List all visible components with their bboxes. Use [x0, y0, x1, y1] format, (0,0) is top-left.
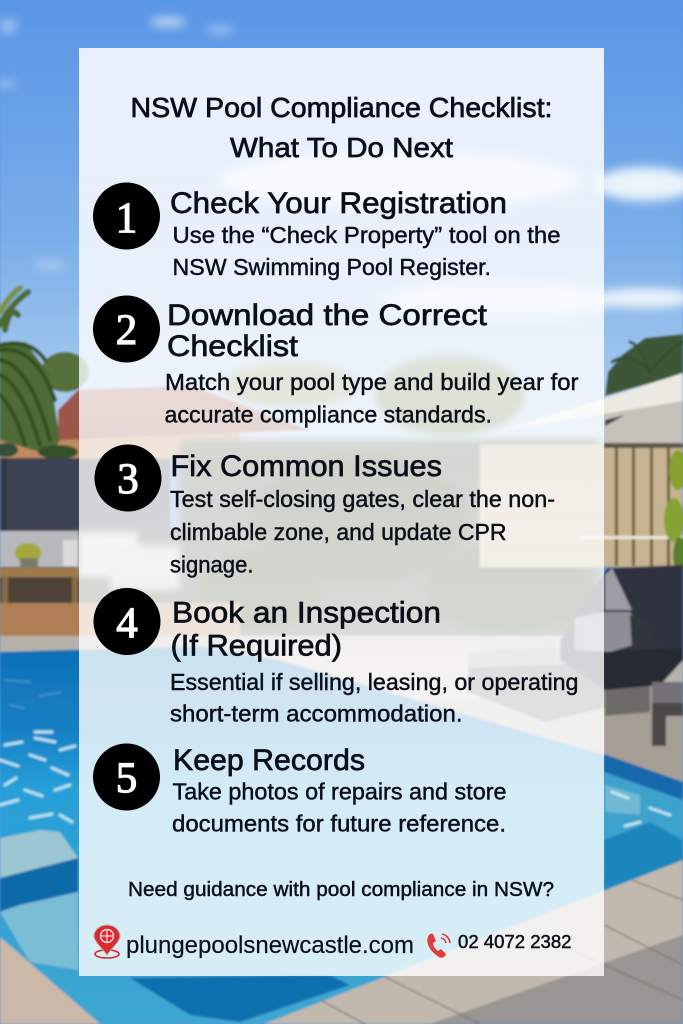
pool water: [0, 646, 683, 1024]
step 2 description: [164, 369, 579, 428]
step 5 description: Take photos of repairs and store: [172, 778, 506, 804]
umbrella: [505, 373, 683, 430]
number badge 3: [94, 444, 162, 512]
pool steps: [0, 830, 78, 878]
table: [0, 568, 78, 577]
clouds: [0, 17, 683, 318]
number badge 4: 4: [116, 600, 138, 647]
icon: location pin globe: [94, 925, 120, 958]
website: plungepoolsnewcastle.com: [126, 932, 414, 959]
paving around pool: [0, 636, 683, 766]
step 3: fix common issues: [94, 444, 555, 578]
lawn area behind furniture: [0, 530, 200, 605]
step 3 description: signage.: [170, 552, 254, 578]
step 3 description: [170, 486, 555, 578]
call to action question: Need guidance with pool compliance in NSW?: [128, 879, 554, 901]
step 5 description: [172, 778, 506, 836]
title: What To Do Next: [230, 132, 453, 163]
number badge 1: 1: [116, 195, 137, 242]
step 1 description: Use the “Check Property” tool on the: [172, 222, 560, 248]
ripples: [0, 732, 670, 826]
step 2 heading: [167, 299, 488, 363]
side chair: [652, 682, 683, 704]
step 2 heading: Download the Correct: [167, 299, 488, 332]
step 4 description: short-term accommodation.: [170, 700, 462, 726]
deck: [0, 603, 240, 638]
number badge 2: [93, 296, 160, 362]
title: [130, 92, 552, 163]
house: [0, 430, 240, 460]
contact row: [94, 925, 572, 959]
trees behind house: [41, 352, 89, 392]
step 5 description: documents for future reference.: [172, 810, 506, 836]
step 1 heading: Check Your Registration: [170, 187, 507, 220]
step 4 heading: Book an Inspection: [172, 596, 441, 630]
step 3 heading: Fix Common Issues: [170, 450, 442, 483]
icon: red phone: [427, 934, 450, 958]
plant at right edge: [664, 450, 683, 573]
number badge 1: [93, 182, 160, 250]
step 4 heading: [170, 596, 441, 662]
number badge 2: 2: [116, 307, 137, 354]
phone number: 02 4072 2382: [458, 932, 572, 952]
step 2 heading: Checklist: [167, 330, 299, 363]
step 2: download the correct checklist: [93, 296, 579, 428]
garden and trees, softly blurred: [180, 355, 600, 640]
step 4 description: [170, 669, 578, 726]
step 5: keep records: [93, 744, 506, 836]
number badge 5: [93, 744, 160, 810]
step 3 description: climbable zone, and update CPR: [170, 519, 506, 545]
dark fence left: [0, 458, 170, 530]
plant on table: [15, 543, 41, 570]
number badge 4: [94, 588, 160, 655]
step 4 description: Essential if selling, leasing, or operating: [170, 669, 578, 695]
right strip of the pool: [604, 754, 683, 800]
step 5 heading: Keep Records: [173, 744, 365, 777]
step 3 description: Test self-closing gates, clear the non-: [170, 486, 555, 512]
step 1: check your registration: [93, 182, 560, 280]
dark lounger: [560, 565, 683, 690]
right palm: [605, 334, 683, 396]
lounger base: [468, 645, 604, 722]
step 4 heading: (If Required): [170, 630, 342, 662]
number badge 5: 5: [116, 755, 137, 802]
sky: [0, 0, 683, 460]
coping lower left: [0, 937, 100, 1024]
sofa left: [0, 531, 78, 567]
paving lower right: [264, 860, 683, 1024]
step 1 description: [172, 222, 560, 280]
wood fence: [480, 445, 683, 567]
translucent white panel: [79, 48, 604, 976]
step 1 description: NSW Swimming Pool Register.: [172, 254, 491, 280]
title: NSW Pool Compliance Checklist:: [130, 92, 552, 123]
step 4: book an inspection: [94, 588, 578, 726]
left palm: [0, 342, 60, 455]
step 2 description: Match your pool type and build year for: [165, 369, 579, 395]
number badge 3: 3: [117, 456, 139, 503]
step 2 description: accurate compliance standards.: [164, 402, 492, 428]
